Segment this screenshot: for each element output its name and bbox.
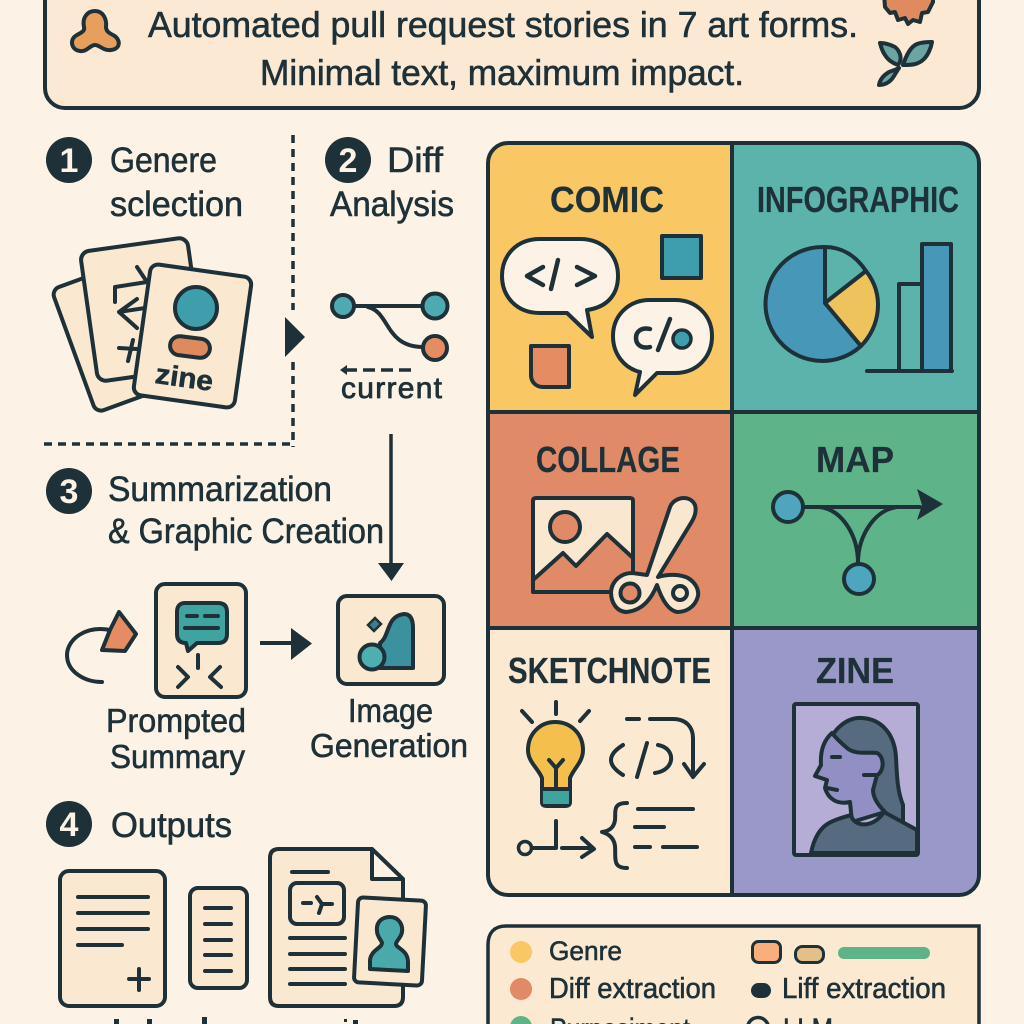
label: prompted summary: Prompted	[106, 702, 246, 739]
panel: collage	[489, 412, 732, 628]
step 4 heading	[46, 801, 232, 847]
step 2 heading	[325, 137, 454, 224]
icon: output slip	[190, 888, 247, 988]
panel: art form grid	[488, 143, 979, 895]
panel: legend	[488, 926, 979, 1024]
step 3 heading: Summarization	[108, 470, 332, 509]
panel: zine	[732, 628, 978, 894]
panel: map	[732, 412, 978, 628]
step 2 heading: Diff	[387, 141, 443, 180]
heading line 1: Automated pull request stories in 7 art forms.	[148, 4, 858, 45]
icon: diff branches: current	[341, 372, 443, 405]
icon: orange blob	[72, 11, 119, 51]
icon: output document	[60, 871, 165, 1006]
legend: genre: Genre	[549, 936, 622, 966]
arrow: summary to image	[260, 628, 312, 660]
step 1 heading	[46, 137, 243, 224]
grid frame	[488, 143, 979, 895]
panel: infographic: INFOGRAPHIC	[757, 179, 959, 220]
step 3 heading	[46, 468, 384, 551]
label: prompted summary	[106, 702, 246, 775]
step 2 heading: 2	[339, 142, 357, 180]
arrow: step 1 to step 2	[285, 317, 305, 357]
icon: genre cards: zine	[153, 358, 215, 397]
legend: third row	[510, 1013, 691, 1024]
step 4 heading: 4	[60, 806, 79, 844]
step 3 heading: & Graphic Creation	[108, 512, 384, 551]
panel: comic	[489, 144, 732, 412]
legend: genre	[510, 936, 622, 966]
legend: llm	[748, 1013, 833, 1024]
legend: liff extraction: Liff extraction	[782, 973, 946, 1005]
icon: genre cards	[51, 237, 252, 413]
step 1 heading: Genere	[110, 141, 217, 180]
label: image generation	[310, 692, 468, 764]
icon: light bulb	[522, 702, 589, 806]
label: image generation: Image	[348, 692, 433, 729]
divider lines	[44, 135, 293, 447]
step 1 heading: 1	[60, 142, 78, 180]
step 1 heading: sclection	[110, 185, 243, 224]
panel: comic: COMIC	[550, 179, 664, 220]
panel: sketchnote	[489, 628, 732, 894]
icon: prompted summary card	[156, 584, 246, 697]
icon: diff branches	[332, 294, 448, 405]
icon: curved arrow with orange head	[67, 612, 136, 682]
panel: infographic	[732, 144, 978, 412]
sketch: start node	[518, 842, 532, 854]
sketch: code arrow	[611, 719, 704, 777]
icon: output report with photo	[270, 849, 426, 1006]
step 4 heading: Outputs	[111, 806, 232, 845]
step 3 heading: 3	[60, 473, 78, 511]
legend: diff extraction: Diff extraction	[549, 973, 716, 1005]
cut-off output captions	[114, 1017, 358, 1024]
legend: swatches	[752, 942, 930, 962]
zine portrait	[794, 704, 918, 855]
header banner	[45, 0, 979, 108]
sketch: flow and list	[533, 803, 697, 868]
panel: map: MAP	[816, 439, 894, 480]
heading line 2: Minimal text, maximum impact.	[260, 52, 744, 93]
panel: sketchnote: SKETCHNOTE	[508, 650, 711, 691]
label: prompted summary: Summary	[110, 738, 245, 775]
icon: teal sprout	[879, 42, 932, 85]
icon: orange flower	[884, 0, 933, 24]
arrow: diff down to image generation	[378, 434, 404, 581]
panel: zine: ZINE	[816, 650, 894, 691]
label: image generation: Generation	[310, 727, 468, 764]
panel: collage: COLLAGE	[536, 439, 680, 480]
icon: image generation card	[338, 596, 444, 684]
step 2 heading: Analysis	[330, 185, 454, 224]
